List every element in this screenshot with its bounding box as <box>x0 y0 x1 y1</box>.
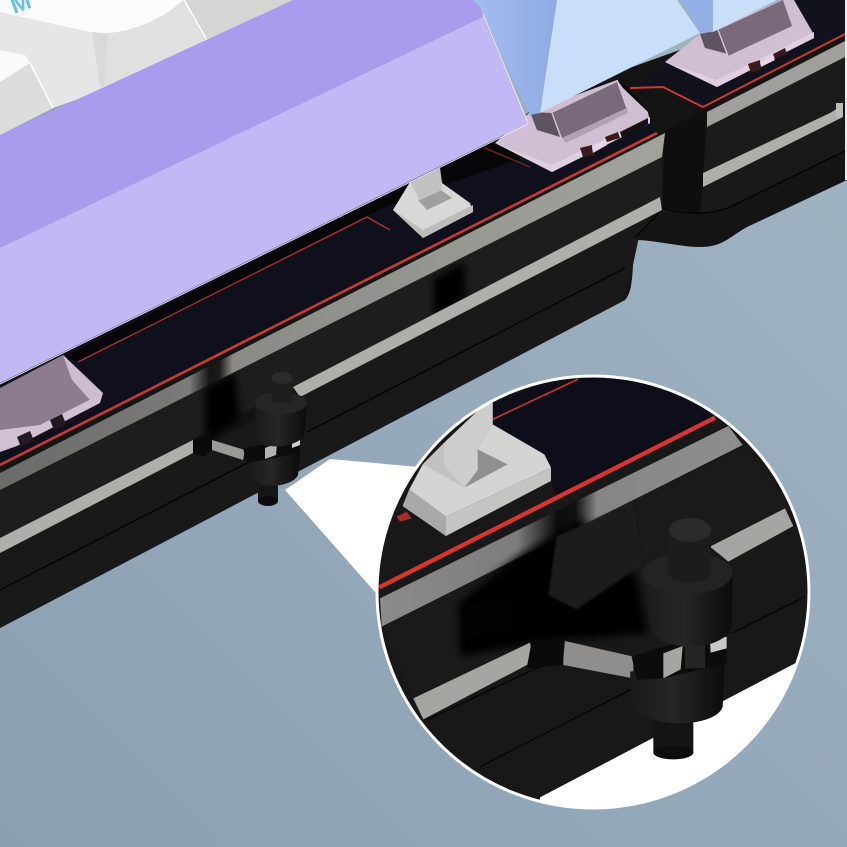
centre switch <box>495 80 650 172</box>
black arm <box>527 640 565 668</box>
right switch <box>665 0 814 87</box>
callout pointer <box>285 459 430 592</box>
panel lines <box>427 597 805 767</box>
main red line <box>379 418 715 587</box>
circle base <box>378 384 808 800</box>
magnified pin <box>630 518 733 759</box>
magnified circle <box>370 367 820 820</box>
thin red line <box>493 379 578 419</box>
white stem <box>403 397 551 536</box>
purple keycap <box>0 0 528 384</box>
white area under keyboard <box>540 663 796 806</box>
rails <box>413 508 793 719</box>
lower panels <box>383 446 790 698</box>
blue keycap side <box>460 0 557 115</box>
top deck <box>0 0 847 465</box>
second blue keycap <box>682 0 777 33</box>
red trim <box>0 33 847 465</box>
image edge <box>845 0 847 180</box>
latch strip <box>563 641 633 678</box>
keyboard body <box>0 0 847 628</box>
deck <box>493 378 714 496</box>
blue keycap <box>540 0 700 113</box>
silver rails <box>0 103 843 553</box>
left switch <box>0 355 103 452</box>
shadow block <box>458 502 647 657</box>
white stabilizer stem <box>393 168 473 238</box>
grey band <box>380 426 743 627</box>
hinge pin <box>193 372 307 506</box>
left red remnant <box>397 512 412 522</box>
circle ring <box>377 376 809 808</box>
grey bands <box>0 41 845 490</box>
white keycaps <box>0 0 300 135</box>
